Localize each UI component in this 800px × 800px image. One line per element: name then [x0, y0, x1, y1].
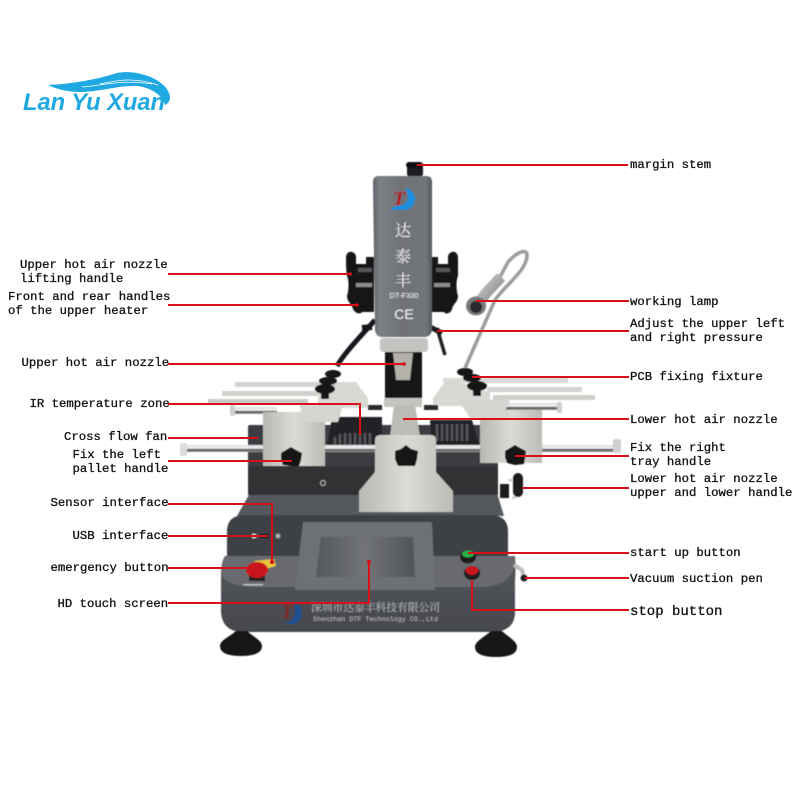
logo: Lan Yu Xuan	[23, 72, 170, 116]
label: adjust pressure: and right pressure	[630, 331, 763, 345]
label: upper hot air nozzle lifting handle: lifting handle	[20, 272, 123, 286]
right carriage	[458, 400, 542, 463]
center carriage	[359, 398, 453, 512]
column brand mark: T	[393, 188, 406, 210]
gooseneck lamp	[465, 252, 527, 368]
emergency button	[243, 559, 276, 586]
label: lower nozzle handle: upper and lower handle	[630, 486, 792, 500]
base unit	[220, 493, 528, 657]
touch screen bezel	[295, 522, 435, 590]
column lettering	[389, 222, 419, 322]
column lettering: 达	[395, 222, 411, 240]
vacuum pen holder	[514, 565, 528, 582]
PCB fixtures	[318, 382, 490, 410]
label: sensor interface	[50, 496, 274, 564]
label: stop button	[472, 580, 722, 620]
label: lower nozzle handle	[522, 472, 792, 500]
base brand mark	[281, 601, 302, 624]
label: fix the left pallet handle	[72, 448, 292, 476]
logo: Lan Yu Xuan: Lan Yu Xuan	[23, 89, 165, 116]
label: lower nozzle handle: Lower hot air nozzle	[630, 472, 778, 486]
label: PCB fixing fixture: PCB fixing fixture	[630, 370, 763, 384]
base company name	[311, 600, 440, 624]
column lettering: 泰	[395, 248, 411, 266]
label: start up button: start up button	[630, 546, 741, 560]
base brand mark: T	[281, 601, 294, 623]
touch screen	[316, 537, 415, 577]
label: IR temperature zone	[30, 397, 360, 435]
upper nozzle housing	[337, 320, 445, 402]
label: upper hot air nozzle: Upper hot air nozzle	[22, 356, 169, 370]
sensor and USB ports	[252, 534, 280, 538]
label: fix the right tray handle: Fix the right	[630, 441, 726, 455]
label: fix the right tray handle: tray handle	[630, 455, 711, 469]
right callout labels	[403, 158, 792, 620]
left callout: margin-side labels	[8, 258, 406, 611]
label: working lamp: working lamp	[630, 295, 719, 309]
label: upper hot air nozzle	[22, 356, 406, 370]
label: fix the right tray handle	[515, 441, 726, 469]
back guide rails	[208, 378, 595, 416]
label: adjust pressure	[437, 317, 785, 345]
left carriage	[263, 405, 343, 466]
label: HD touch screen: HD touch screen	[58, 597, 168, 611]
upper chassis	[248, 425, 498, 495]
label: fix the left pallet handle: Fix the left	[72, 448, 161, 462]
label: cross flow fan: Cross flow fan	[64, 430, 167, 444]
label: sensor interface: Sensor interface	[50, 496, 169, 510]
column lettering: DT-F330	[389, 291, 419, 300]
label: vacuum suction pen: Vacuum suction pen	[630, 572, 763, 586]
label: IR temperature zone: IR temperature zone	[30, 397, 170, 411]
label: front and rear handles: Front and rear handles	[8, 290, 170, 304]
column lettering: CE	[394, 306, 414, 322]
stop button	[464, 566, 480, 580]
base company name: 深圳市达泰丰科技有限公司	[311, 600, 440, 614]
label: stop button: stop button	[630, 604, 722, 620]
label: fix the left pallet handle: pallet handle	[72, 462, 168, 476]
label: adjust pressure: Adjust the upper left	[630, 317, 785, 331]
product: rework station	[180, 162, 621, 657]
right cable loop	[500, 473, 523, 498]
base feet	[220, 631, 517, 657]
label: lower hot air nozzle: Lower hot air nozzle	[630, 413, 778, 427]
label: upper hot air nozzle lifting handle	[20, 258, 352, 286]
label: HD touch screen	[58, 560, 371, 611]
upper heater side handles	[346, 252, 458, 313]
column lettering: 丰	[395, 272, 411, 290]
label: upper hot air nozzle lifting handle: Upper hot air nozzle	[20, 258, 168, 272]
label: USB interface: USB interface	[72, 529, 168, 543]
label: front and rear handles: of the upper heater	[8, 304, 148, 318]
label: front and rear handles	[8, 290, 359, 318]
black star knobs	[281, 368, 526, 466]
label: margin stem: margin stem	[630, 158, 711, 172]
start button	[460, 550, 476, 564]
label: emergency button: emergency button	[50, 561, 169, 575]
slide rod	[180, 439, 621, 456]
base company name: Shenzhan DTF Technology CO.,Ltd	[313, 616, 438, 624]
main heater column	[373, 162, 432, 337]
IR heating zones	[327, 417, 480, 447]
column brand mark	[391, 188, 415, 210]
